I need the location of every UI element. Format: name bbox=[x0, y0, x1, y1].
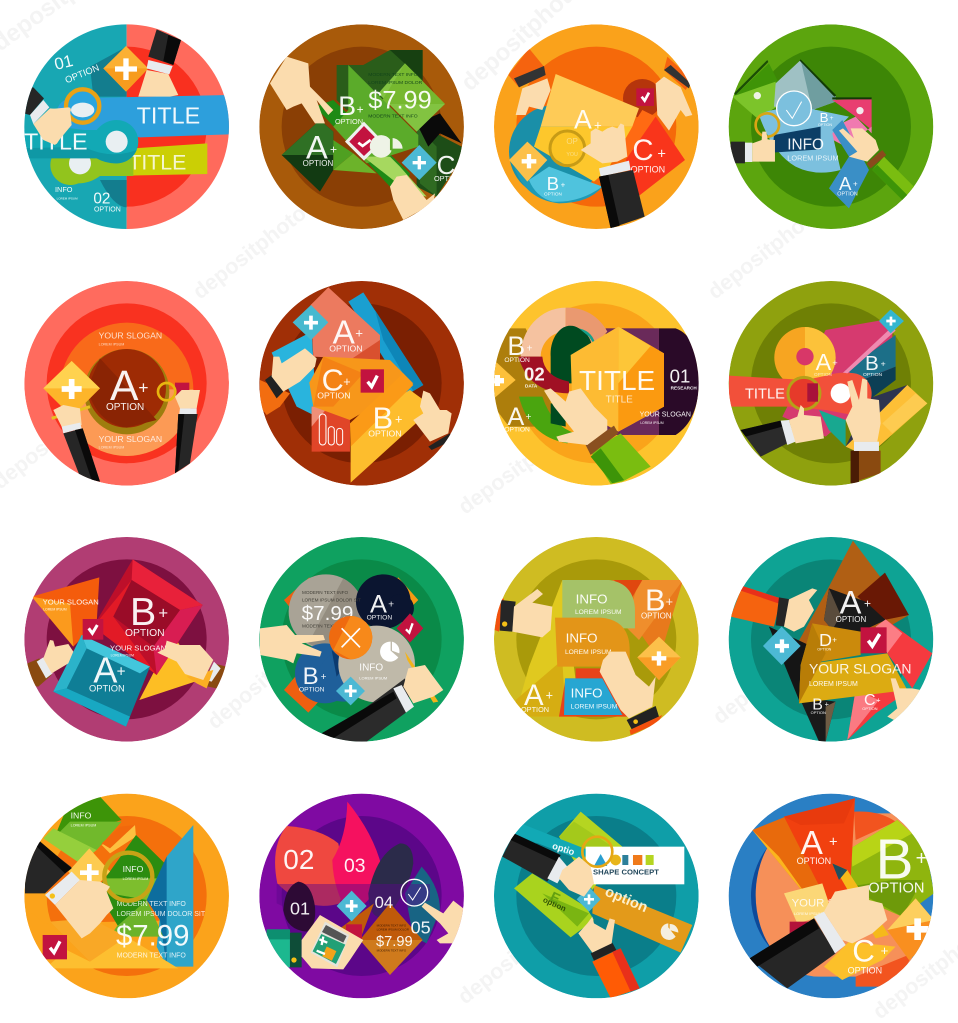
data labels bbox=[504, 331, 697, 433]
labels: OPTI bbox=[434, 174, 451, 183]
hand bottom right bbox=[887, 678, 921, 720]
labels: A bbox=[333, 314, 356, 351]
labels: OPTION bbox=[641, 611, 672, 620]
labels bbox=[303, 72, 455, 183]
option labels: option bbox=[542, 895, 568, 913]
data labels: RESEARCH bbox=[671, 385, 697, 390]
labels: C bbox=[322, 364, 344, 398]
hand bbox=[750, 885, 887, 988]
slogans: YOUR SLOGAN bbox=[99, 434, 162, 444]
yellow title band bbox=[50, 143, 207, 185]
price diamond: LOREM IPSUM DOLOR bbox=[377, 928, 410, 932]
badge 5: slogan bbox=[24, 281, 229, 486]
plus diamond bbox=[879, 309, 904, 333]
labels: + bbox=[881, 943, 889, 958]
plus diamond bbox=[43, 361, 100, 408]
labels: MODERN TEXT INFO bbox=[368, 72, 418, 78]
labels: YOUR SL bbox=[792, 898, 841, 910]
price: MODERN TEXT INFO bbox=[117, 953, 186, 960]
plus diamond bbox=[763, 627, 801, 665]
title: TITLE bbox=[579, 365, 655, 396]
magnifier bbox=[550, 131, 585, 166]
badge 3: grades bbox=[494, 24, 699, 229]
pie icon bbox=[370, 135, 403, 158]
info card 1: INFO bbox=[576, 591, 608, 606]
labels: OPTION bbox=[299, 686, 325, 693]
hand left bbox=[52, 405, 100, 482]
labels: OPTION bbox=[797, 856, 831, 866]
price: $7.99 bbox=[116, 920, 189, 953]
labels: LOREM IPSUM bbox=[43, 608, 67, 612]
labels: OPTION bbox=[303, 159, 333, 168]
price: $7.99 bbox=[302, 602, 353, 625]
labels: OPTION bbox=[868, 881, 924, 897]
info card 3 bbox=[564, 678, 622, 715]
hand bbox=[25, 840, 113, 938]
info card 1 bbox=[562, 580, 635, 628]
data labels: YOUR SLOGAN bbox=[640, 412, 691, 419]
labels: OPTION bbox=[863, 372, 882, 378]
labels: B bbox=[865, 352, 879, 375]
badge 6: blue sheets bbox=[259, 281, 464, 486]
yellow title band: TITLE bbox=[128, 150, 186, 174]
labels: C bbox=[852, 934, 875, 969]
labels: A bbox=[801, 825, 824, 862]
price: LOREM IPSUM DOLOR SIT bbox=[117, 911, 206, 918]
check tab bbox=[175, 383, 189, 397]
labels: + bbox=[829, 835, 838, 851]
hand top bbox=[731, 586, 817, 632]
labels: + bbox=[864, 596, 871, 610]
plus diamond bbox=[336, 677, 365, 705]
labels: + bbox=[357, 102, 364, 116]
labels: A bbox=[524, 679, 544, 712]
labels: + bbox=[388, 599, 394, 610]
background watermarks: depositphotos bbox=[708, 618, 840, 729]
labels: + bbox=[881, 359, 886, 369]
badge 15: shape concept bbox=[494, 794, 699, 998]
hand left bbox=[508, 48, 551, 115]
grade labels: OPTION bbox=[837, 191, 858, 197]
background watermarks: depositphotos bbox=[188, 193, 320, 304]
info card 3: INFO bbox=[571, 685, 603, 700]
slogans: LOREM IPSUM bbox=[99, 446, 124, 450]
hand top left bbox=[270, 57, 333, 123]
info card 2: INFO bbox=[566, 631, 598, 646]
labels: A bbox=[574, 104, 592, 134]
labels: LOREM IPSUM bbox=[111, 654, 134, 658]
labels: + bbox=[158, 603, 168, 622]
labels: OPTION bbox=[329, 343, 362, 353]
labels: LOREM IPSUM bbox=[794, 911, 822, 916]
labels: MODERN TEXT INFO bbox=[368, 113, 418, 119]
price: LOREM IPSUM DOLOR SIT bbox=[302, 597, 361, 602]
hand right bbox=[839, 128, 914, 200]
badge 1: titles bbox=[23, 23, 230, 230]
hand bottom bbox=[578, 917, 640, 998]
labels: B bbox=[876, 828, 913, 891]
check box bbox=[636, 88, 654, 106]
option labels: LOREM IPSUM bbox=[57, 196, 78, 200]
option labels: 02 bbox=[93, 190, 110, 207]
price: MODERN TEXT INFO bbox=[302, 590, 348, 595]
plus diamond bbox=[68, 848, 110, 894]
blue title band: TITLE bbox=[137, 102, 200, 128]
labels: OPTION bbox=[631, 165, 665, 175]
labels: A bbox=[816, 349, 832, 375]
labels: D bbox=[819, 630, 832, 650]
labels: + bbox=[916, 848, 927, 870]
option labels bbox=[52, 51, 121, 213]
hand right bbox=[157, 641, 227, 688]
hexagon bbox=[571, 327, 664, 432]
check box bbox=[861, 627, 887, 653]
option labels: option bbox=[602, 884, 650, 916]
blue title band bbox=[57, 95, 229, 137]
info card 3: LOREM IPSUM bbox=[571, 704, 617, 711]
labels: OPTION bbox=[862, 706, 878, 711]
background watermarks: depositphotos bbox=[703, 193, 835, 304]
plus diamond bbox=[337, 891, 367, 921]
labels: A bbox=[93, 650, 117, 691]
plus diamond bbox=[402, 145, 437, 180]
main label: + bbox=[138, 377, 148, 397]
white panel bbox=[586, 847, 684, 884]
info labels: INFO bbox=[123, 864, 144, 874]
hand right bbox=[656, 57, 692, 131]
labels: C bbox=[437, 150, 455, 180]
grade labels: + bbox=[853, 180, 858, 189]
labels bbox=[811, 583, 881, 715]
labels: + bbox=[343, 375, 351, 389]
plus diamond bbox=[509, 142, 547, 182]
slogan panel bbox=[799, 623, 912, 703]
labels: TITLE bbox=[745, 386, 785, 402]
labels: OPTION bbox=[317, 391, 350, 401]
labels: OPTION bbox=[848, 965, 882, 975]
labels: + bbox=[321, 672, 327, 683]
pie icon bbox=[661, 923, 678, 940]
labels bbox=[299, 590, 394, 693]
info card 2 bbox=[555, 618, 630, 667]
labels: A bbox=[370, 590, 387, 618]
labels: $7.99 bbox=[368, 86, 432, 114]
labels: OPTION bbox=[368, 429, 401, 439]
badge 2: price bbox=[259, 24, 464, 229]
data labels: OPTION bbox=[504, 357, 530, 364]
labels: OPTION bbox=[367, 614, 392, 621]
bar icon bbox=[319, 414, 343, 445]
info labels: LOREM IPSUM bbox=[123, 877, 148, 881]
data labels: 01 bbox=[670, 366, 690, 387]
labels: OPTION bbox=[817, 648, 832, 652]
labels: + bbox=[832, 358, 838, 368]
labels: OPTION bbox=[814, 372, 832, 377]
badge 13: price bbox=[20, 794, 229, 998]
labels: + bbox=[657, 146, 666, 162]
labels: B bbox=[645, 584, 665, 618]
plus diamond bbox=[577, 887, 601, 912]
labels bbox=[792, 825, 927, 975]
magnifier bbox=[582, 837, 612, 867]
hand left bbox=[502, 833, 594, 897]
info card 1: LOREM IPSUM bbox=[575, 609, 622, 616]
ring bbox=[158, 383, 175, 400]
background watermarks: depositphotos bbox=[453, 411, 588, 519]
hand right bbox=[846, 378, 881, 483]
badge 14: numbered petals bbox=[259, 794, 464, 998]
price diamond: MODERN TEXT INFO bbox=[377, 924, 407, 928]
labels bbox=[745, 349, 886, 402]
labels: LOREM IPSUM bbox=[359, 675, 387, 680]
numbers: 02 bbox=[283, 844, 314, 875]
numbers bbox=[283, 844, 431, 937]
close circle bbox=[329, 616, 372, 659]
check ring bbox=[777, 91, 811, 126]
hand left bbox=[495, 589, 552, 637]
data labels: 02 bbox=[524, 364, 545, 385]
info card 2: LOREM IPSUM bbox=[565, 649, 612, 656]
labels: A bbox=[306, 128, 328, 165]
info labels: INFO bbox=[71, 810, 92, 820]
badge 10: circles bbox=[259, 537, 464, 742]
magnifier bbox=[104, 853, 152, 901]
white panel: SHAPE CONCEPT bbox=[593, 868, 659, 877]
plus diamond bbox=[293, 305, 328, 340]
labels: + bbox=[594, 117, 602, 132]
price bbox=[302, 590, 361, 628]
labels: + bbox=[546, 688, 553, 702]
labels: C bbox=[864, 692, 876, 709]
slogan panel: LOREM IPSUM bbox=[809, 681, 858, 688]
slogans: LOREM IPSUM bbox=[99, 343, 124, 347]
info banner bbox=[772, 127, 839, 163]
badge 9: squares bbox=[24, 537, 229, 742]
pie icon bbox=[380, 642, 399, 662]
labels bbox=[317, 314, 402, 439]
labels bbox=[43, 590, 168, 693]
labels: + bbox=[666, 595, 673, 609]
grade labels: OPTION bbox=[818, 123, 832, 127]
title: TITLE bbox=[606, 395, 633, 406]
labels: + bbox=[117, 664, 126, 681]
labels: + bbox=[395, 412, 402, 426]
teal title band: TITLE bbox=[24, 128, 88, 154]
badge 11: info cards bbox=[494, 537, 699, 742]
slogans bbox=[99, 331, 162, 450]
hand left bbox=[27, 640, 73, 687]
option labels bbox=[542, 841, 650, 916]
data labels: + bbox=[526, 412, 532, 423]
labels: B bbox=[303, 663, 319, 690]
numbers: 04 bbox=[375, 893, 393, 912]
price diamond bbox=[340, 903, 423, 975]
main label: A bbox=[110, 362, 139, 410]
check diamond bbox=[345, 122, 378, 161]
info labels bbox=[71, 810, 148, 881]
data labels: + bbox=[527, 344, 533, 355]
labels: B bbox=[812, 696, 823, 713]
hand left bbox=[731, 132, 775, 163]
ring bbox=[788, 377, 820, 409]
grade labels: + bbox=[830, 115, 834, 122]
hand with calculator bbox=[302, 915, 363, 969]
teal title band bbox=[23, 120, 138, 163]
price: MODERN TEXT INFO bbox=[117, 901, 186, 908]
labels: B bbox=[373, 401, 393, 435]
teal square bbox=[53, 635, 150, 727]
background watermarks: depositphotos bbox=[202, 619, 332, 734]
check box bbox=[43, 935, 67, 959]
labels: OPTION bbox=[544, 191, 562, 196]
slogan panel: YOUR SLOGAN bbox=[809, 660, 912, 676]
labels: + bbox=[876, 696, 881, 705]
price: MODERN TEXT INFO bbox=[302, 623, 348, 628]
labels: B bbox=[547, 173, 559, 194]
hand centre bbox=[581, 123, 645, 228]
info labels: LOREM IPSUM bbox=[71, 824, 96, 828]
check ring bbox=[401, 879, 428, 906]
badge 16: pencil hand bbox=[729, 794, 934, 998]
magnifier bbox=[66, 89, 99, 123]
hand left bbox=[260, 625, 325, 663]
option labels: 01 bbox=[52, 51, 75, 74]
labels: OPTION bbox=[125, 628, 165, 639]
hand left bbox=[741, 405, 824, 457]
labels: OPTION bbox=[521, 705, 549, 714]
data labels: DATA bbox=[525, 383, 538, 388]
numbers: 03 bbox=[344, 856, 365, 877]
labels: INFO bbox=[359, 663, 383, 674]
labels: B bbox=[130, 590, 156, 634]
option labels: OPTION bbox=[64, 63, 101, 85]
labels: C bbox=[632, 134, 654, 167]
hand bottom right bbox=[390, 175, 435, 220]
hand bbox=[544, 388, 651, 484]
grade labels: B bbox=[820, 110, 829, 125]
option labels: OPTION bbox=[94, 206, 121, 213]
labels: YOUR SLOGAN bbox=[43, 598, 99, 607]
hand right bbox=[175, 390, 200, 473]
option labels: optio bbox=[551, 841, 576, 857]
data labels: B bbox=[507, 331, 525, 361]
check box bbox=[361, 369, 384, 393]
info banner: INFO bbox=[787, 136, 824, 153]
labels: + bbox=[561, 180, 566, 189]
price diamond: $7.99 bbox=[376, 934, 413, 950]
option labels: E bbox=[548, 888, 563, 907]
labels: OPTION bbox=[335, 117, 363, 126]
plus icon bbox=[907, 918, 928, 940]
data labels: OPTION bbox=[504, 426, 530, 433]
hand right with pencil bbox=[320, 652, 443, 742]
labels: + bbox=[832, 636, 837, 645]
hand left bbox=[265, 348, 317, 398]
info banner: LOREM IPSUM bbox=[787, 154, 839, 163]
background watermarks: depositphotos bbox=[453, 898, 585, 1009]
hand right bbox=[422, 901, 463, 943]
labels: + bbox=[825, 700, 829, 709]
data labels: A bbox=[507, 403, 524, 431]
price bbox=[116, 901, 206, 960]
numbers: 01 bbox=[290, 898, 310, 918]
red square bbox=[93, 559, 203, 675]
data labels: LOREM IPSUM bbox=[640, 421, 664, 425]
check diamond bbox=[397, 613, 423, 643]
magnifier bbox=[756, 113, 779, 137]
check box bbox=[83, 619, 103, 640]
pencil bbox=[832, 863, 889, 938]
badge 7: hexagon title bbox=[494, 281, 699, 486]
hand right bbox=[600, 652, 662, 735]
slogans: YOUR SLOGAN bbox=[99, 331, 162, 341]
labels: YOU bbox=[566, 152, 578, 158]
grade labels: A bbox=[839, 173, 852, 194]
plus diamond bbox=[637, 637, 681, 680]
hand top right bbox=[138, 29, 181, 97]
badge 12: triangles bbox=[729, 537, 933, 742]
grade labels bbox=[818, 110, 858, 197]
labels: A bbox=[840, 583, 862, 620]
main label bbox=[106, 370, 148, 410]
main label: OPTION bbox=[106, 402, 144, 413]
labels: OPTION bbox=[836, 615, 866, 624]
hand right bbox=[413, 391, 453, 450]
labels: OPTION bbox=[89, 683, 125, 693]
labels: B bbox=[338, 91, 356, 121]
badge 4: info check bbox=[729, 24, 933, 229]
hand left bbox=[23, 87, 72, 145]
labels: LOREM IPSUM DOLOR bbox=[368, 80, 423, 86]
price diamond: MODERN TEXT INFO bbox=[377, 948, 407, 952]
labels bbox=[544, 104, 666, 196]
labels: OPTION bbox=[811, 710, 826, 715]
labels: OP bbox=[566, 137, 578, 146]
labels bbox=[521, 584, 673, 714]
labels: + bbox=[355, 325, 363, 340]
labels: YOUR SLOGAN bbox=[110, 644, 166, 653]
labels: + bbox=[330, 142, 337, 156]
badge 8: red banner bbox=[729, 281, 933, 486]
option labels: INFO bbox=[55, 185, 73, 194]
numbers: 05 bbox=[411, 917, 431, 937]
